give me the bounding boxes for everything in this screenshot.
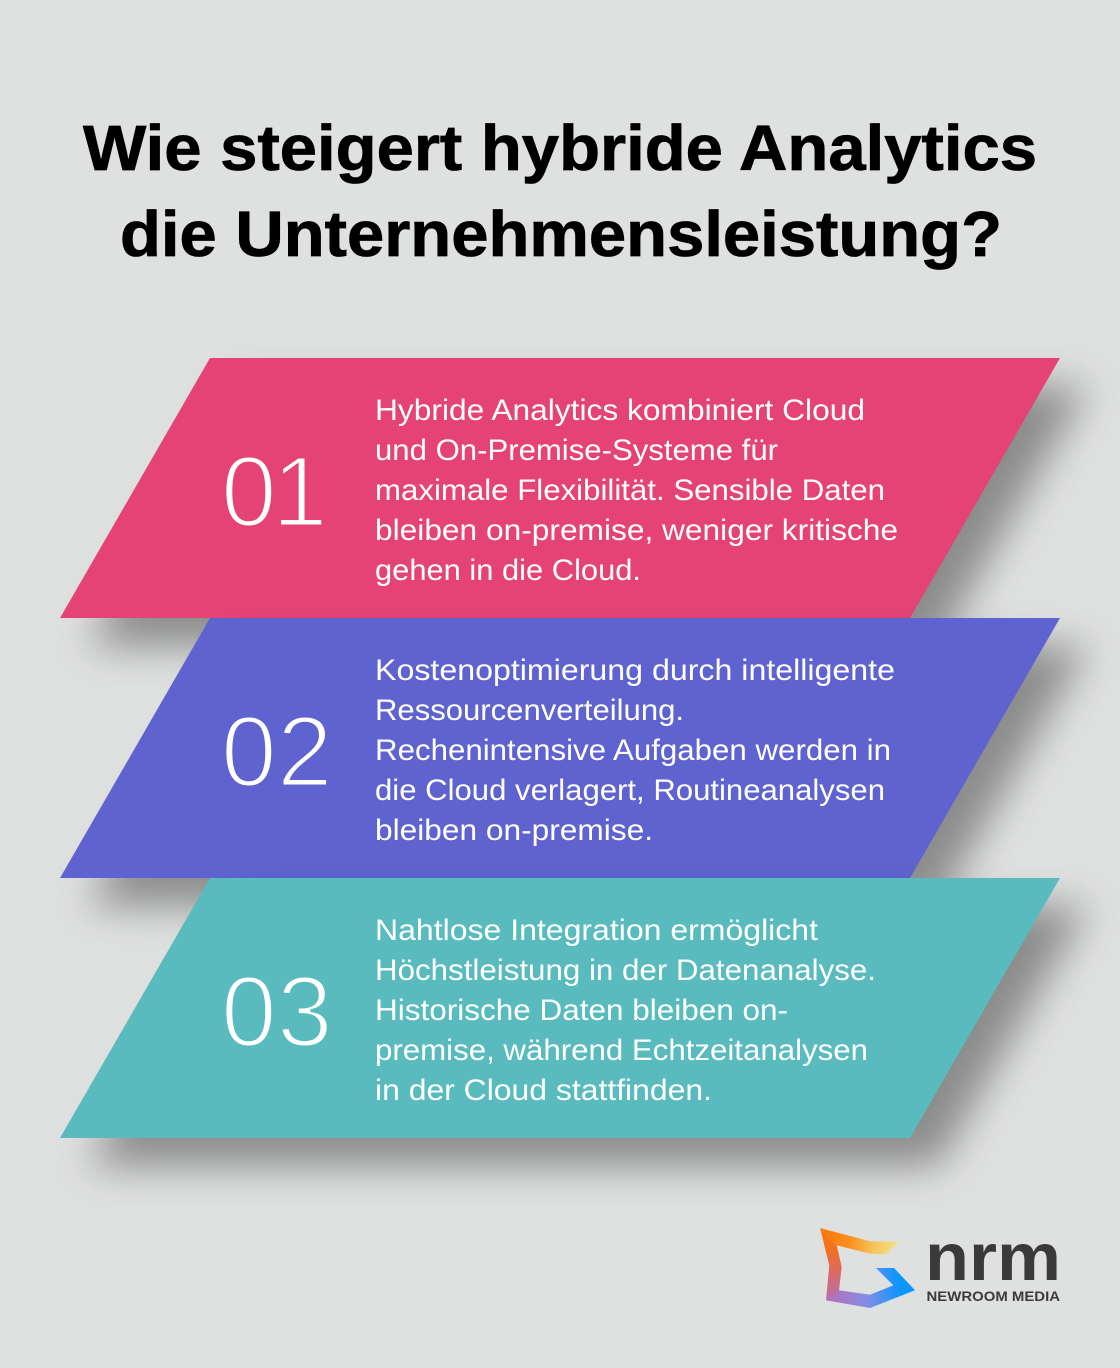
- text: step 01 description: [375, 394, 898, 587]
- text: step 02 description: Ressourcenverteilung.: [375, 694, 684, 727]
- panel: step 01: [60, 358, 1088, 646]
- text: step 02 description: Kostenoptimierung durch intelligente: [375, 654, 895, 687]
- title: Wie steigert hybride Analytics: [83, 112, 1037, 184]
- panel: step 02: [60, 618, 1088, 906]
- text: step 01 description: gehen in die Cloud.: [375, 554, 641, 587]
- title: die Unternehmensleistung?: [120, 198, 1002, 270]
- text: step 02 description: die Cloud verlagert, Routineanalysen: [375, 774, 885, 807]
- text: step 01 description: und On-Premise-Systeme für: [375, 434, 778, 467]
- logo: nrm newroom media: [820, 1220, 1061, 1308]
- logo wordmark: nrm: [925, 1220, 1061, 1295]
- text: step 02 description: bleiben on-premise.: [375, 814, 653, 847]
- title: [83, 112, 1037, 270]
- text: step 01 description: maximale Flexibilität. Sensible Daten: [375, 474, 885, 507]
- text: step 03 description: Historische Daten bleiben on-: [375, 994, 788, 1027]
- text: step 01 description: Hybride Analytics kombiniert Cloud: [375, 394, 865, 427]
- icon: logo mark: [820, 1228, 915, 1308]
- number 02: 02: [221, 696, 333, 808]
- panel: step 03: [60, 878, 1088, 1166]
- number 01: 01: [221, 436, 328, 548]
- text: step 03 description: Höchstleistung in der Datenanalyse.: [375, 954, 876, 987]
- text: step 03 description: in der Cloud stattfinden.: [375, 1074, 712, 1107]
- text: step 02 description: Rechenintensive Aufgaben werden in: [375, 734, 891, 767]
- text: step 03 description: [375, 914, 876, 1107]
- text: step 02 description: [375, 654, 895, 847]
- text: step 03 description: premise, während Echtzeitanalysen: [375, 1034, 868, 1067]
- text: step 03 description: Nahtlose Integration ermöglicht: [375, 914, 819, 947]
- logo tagline: NEWROOM MEDIA: [926, 1289, 1060, 1304]
- number 03: 03: [221, 956, 333, 1068]
- text: step 01 description: bleiben on-premise, weniger kritische: [375, 514, 898, 547]
